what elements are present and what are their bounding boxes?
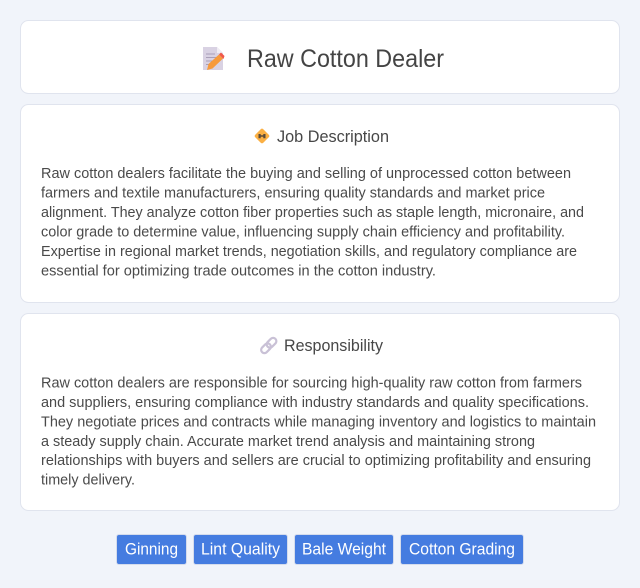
title: Raw Cotton Dealer [247, 45, 444, 73]
text block: job description body: Raw cotton dealers facilitate the buying and selling of unprocessed cotton between [41, 166, 571, 182]
tag: lint quality [194, 534, 288, 564]
tags row [116, 534, 524, 564]
panel: title header [20, 20, 620, 94]
panel: job description [20, 104, 620, 302]
icon: memo with pencil [203, 47, 224, 70]
icon: chain link [260, 337, 278, 354]
text block: responsibility body [41, 376, 596, 488]
text block: responsibility body: and suppliers, ensuring compliance with industry standards and quality specifications. [41, 395, 589, 411]
text block: job description body: alignment. They analyze cotton fiber properties such as staple length, micronaire, and [41, 205, 584, 221]
text block: job description body: essential for optimizing trade outcomes in the cotton industry. [41, 263, 436, 279]
tag: lint quality: Lint Quality [201, 540, 281, 558]
text block: responsibility body: timely delivery. [41, 472, 135, 488]
text block: responsibility body: Raw cotton dealers are responsible for sourcing high-quality raw cotton from farmers [41, 376, 582, 392]
tag: ginning [116, 534, 186, 564]
text block: responsibility body: a steady supply chain. Accurate market trend analysis and maintaining strong [41, 434, 535, 450]
text block: responsibility body: They negotiate prices and contracts while managing inventory and logistics to maintain [41, 414, 596, 430]
text block: job description body: Expertise in regional market trends, negotiation skills, and regulatory compliance are [41, 244, 577, 260]
tag: bale weight [294, 534, 394, 564]
tag: ginning: Ginning [125, 540, 178, 558]
text block: job description body [41, 166, 584, 279]
heading: job description: Job Description [277, 128, 389, 146]
tag: bale weight: Bale Weight [302, 540, 386, 558]
tag: cotton grading [400, 534, 524, 564]
tag: cotton grading: Cotton Grading [409, 540, 515, 558]
text block: job description body: farmers and textile manufacturers, ensuring quality standards and market price [41, 186, 545, 202]
panel: responsibility [20, 314, 620, 510]
text block: responsibility body: relationships with buyers and sellers are crucial to optimizing profitability and ensuring [41, 453, 591, 469]
icon: orange diamond sign [254, 128, 270, 144]
heading: responsibility: Responsibility [284, 337, 384, 355]
text block: job description body: color grade to determine value, influencing supply chain efficiency and profitability. [41, 224, 565, 240]
